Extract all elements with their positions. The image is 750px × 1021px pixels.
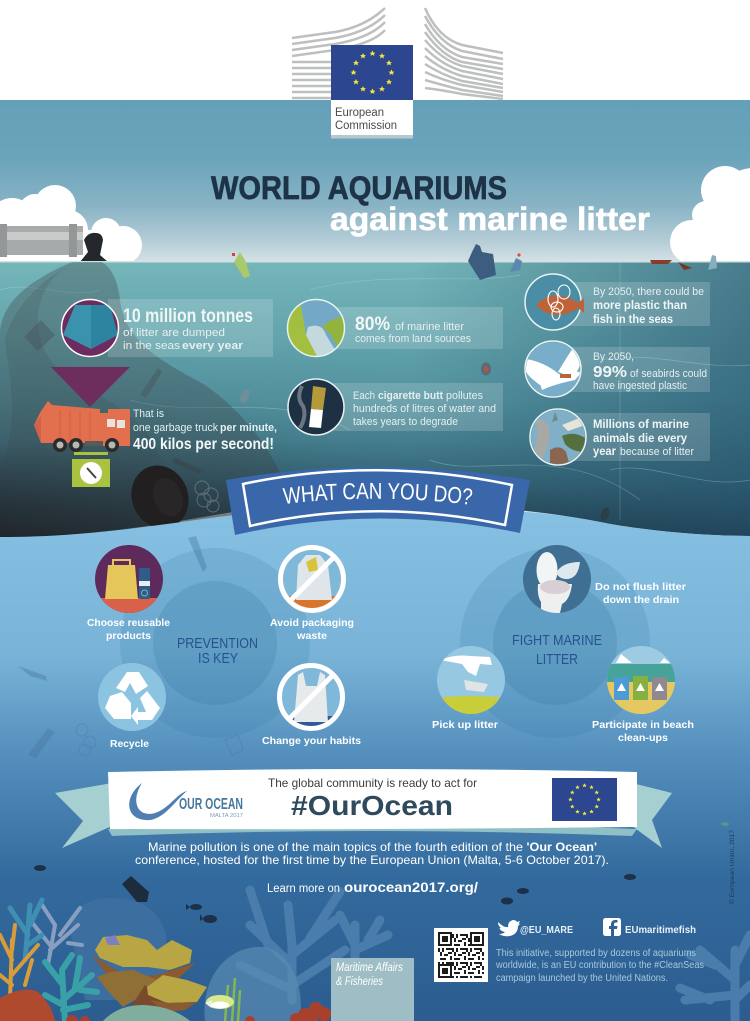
European Commission logo: European [335, 107, 384, 119]
icon: avoid packaging [278, 545, 346, 615]
title [211, 170, 650, 237]
social media: @EU_MARE [520, 924, 573, 936]
icon: cigarette butt [288, 379, 344, 435]
text: garbage truck per minute: one garbage truck [133, 422, 218, 434]
logo: our ocean: MALTA 2017 [210, 813, 243, 819]
panel: cigarette butt: takes years to degrade [353, 416, 458, 428]
learn more: ourocean2017.org/ [344, 879, 478, 895]
cloud left [0, 185, 142, 265]
social media: EUmaritimefish [625, 924, 696, 936]
label: waste [296, 630, 327, 642]
panel: cigarette butt: cigarette butt [378, 390, 443, 402]
DG label box [331, 958, 414, 1021]
blue branching coral [10, 900, 42, 960]
panel: 80% land sources [288, 300, 503, 358]
panel: seabirds: have ingested plastic [593, 380, 687, 392]
panel: more plastic than fish: By 2050, there could be [593, 286, 704, 298]
panel: seabirds: By 2050, [593, 351, 634, 363]
cloud right [670, 166, 750, 273]
yellow and orange branch coral [0, 925, 38, 1000]
icon: land and river [288, 300, 346, 358]
initiative text: This initiative, supported by dozens of aquariums [496, 948, 696, 959]
label: Avoid packaging [270, 617, 354, 629]
panel: cigarette butt: pollutes [446, 390, 483, 402]
panel: cigarette butt [288, 379, 503, 435]
icon: facebook [603, 918, 621, 936]
icon: seagull [525, 341, 582, 397]
conference text: Marine pollution is one of the main topics of the fourth edition of the 'Our Ocean' [148, 840, 597, 854]
panel: marine animals: Millions of marine [593, 417, 689, 431]
heading: prevention is key: IS KEY [198, 650, 238, 667]
heading: prevention is key: PREVENTION [177, 635, 258, 652]
label [595, 581, 686, 606]
label: Pick up litter [432, 719, 498, 731]
icon: garbage truck [34, 401, 130, 452]
European Commission building [292, 8, 503, 99]
teal coral [45, 955, 97, 1021]
QR code [434, 928, 488, 982]
panel: cigarette butt: hundreds of litres of water and [353, 403, 496, 415]
label [87, 617, 170, 642]
label: clean-ups [618, 732, 668, 744]
light branching coral [30, 905, 82, 965]
text: garbage truck per minute: That is [133, 408, 164, 420]
tire [122, 457, 198, 537]
panel: more plastic than fish: fish in the seas [593, 312, 673, 326]
panel: 10 million tonnes: of litter are dumped [123, 327, 225, 339]
icon: twitter [498, 920, 520, 936]
pipe [0, 224, 83, 257]
brain coral [103, 1005, 190, 1021]
European Commission logo [331, 45, 413, 138]
label: Do not flush litter [595, 581, 686, 593]
icon: toilet [523, 545, 591, 613]
DG label box: & Fisheries [336, 976, 383, 988]
icon: beach clean-up [607, 646, 675, 716]
panel: 10 million tonnes: 10 million tonnes [123, 306, 253, 327]
initiative text: campaign launched by the United Nations. [496, 973, 668, 984]
icon: purple pile of litter [62, 300, 118, 356]
icon: reusable products [95, 545, 163, 614]
arrow: purple triangle [51, 367, 130, 407]
copyright: © European Union, 2017 [729, 829, 736, 904]
lower ocean [0, 510, 750, 1021]
black spill from pipe [80, 233, 108, 262]
label: products [106, 630, 151, 642]
panel: 80% land sources: of marine litter [395, 321, 464, 333]
conference text [135, 840, 609, 867]
fan coral [204, 947, 301, 1021]
icon: change your habits [276, 663, 346, 735]
panel: 10 million tonnes [62, 299, 273, 357]
black litter canister [122, 876, 149, 902]
text: garbage truck per minute: 400 kilos per second! [133, 436, 274, 453]
panel: more plastic than fish [525, 274, 710, 330]
ribbon tail right [632, 783, 672, 848]
panel: 10 million tonnes: every year [182, 340, 244, 352]
label [270, 617, 354, 642]
heading: prevention is key [177, 635, 258, 667]
label [592, 719, 694, 744]
panel: fight marine litter [432, 545, 694, 744]
heading: fight marine litter [512, 632, 602, 668]
panel: 10 million tonnes: in the seas [123, 340, 181, 352]
wave lines [0, 261, 750, 520]
learn more [267, 879, 478, 895]
panel: marine animals: because of litter [620, 446, 694, 458]
logo: our ocean [129, 783, 243, 820]
social media [498, 918, 696, 936]
panel: marine animals: animals die every [593, 431, 687, 445]
banner: what can you do: WHAT CAN YOU DO? [282, 482, 472, 504]
ribbon: #OurOcean [291, 790, 453, 821]
banner: what can you do [226, 467, 530, 535]
ribbon [55, 769, 672, 848]
dark reef mound [70, 898, 170, 1000]
panel: seabirds: of seabirds could [630, 368, 707, 380]
learn more: Learn more on [267, 883, 340, 895]
EU flag [552, 778, 617, 821]
heading: fight marine litter: FIGHT MARINE [512, 632, 602, 649]
initiative text [495, 948, 704, 984]
icon: fish in plastic rings [525, 274, 584, 330]
panel: marine animals: year [593, 444, 616, 458]
conference text: conference, hosted for the first time by the European Union (Malta, 5-6 October 2017). [135, 853, 609, 867]
panel: 80% land sources: comes from land sources [355, 333, 471, 345]
logo: our ocean: OUR OCEAN [179, 796, 243, 813]
European Commission logo: Commission [335, 120, 397, 132]
floating bottles [232, 244, 717, 280]
panel: prevention is key [87, 545, 361, 750]
DG label box: Maritime Affairs [336, 962, 403, 974]
panel: seabirds: 99% [593, 364, 627, 381]
plume of litter [0, 262, 292, 537]
small black fish [34, 822, 729, 923]
icon: recycle [98, 663, 166, 731]
icon: marine animals [530, 409, 588, 466]
panel: more plastic than fish: more plastic than [593, 298, 687, 312]
ribbon: The global community is ready to act for [268, 776, 477, 790]
panel: 80% land sources: 80% [355, 314, 390, 335]
label: Change your habits [262, 735, 361, 747]
red coral right [66, 1002, 331, 1021]
faint litter in lower ocean [18, 536, 243, 758]
table coral [92, 935, 207, 1012]
sea [0, 261, 750, 540]
initiative text: worldwide, is an EU contribution to the #CleanSeas [495, 960, 704, 971]
submerged litter [24, 320, 611, 522]
heading: fight marine litter: LITTER [536, 651, 578, 668]
title: against marine litter [330, 201, 650, 237]
label: down the drain [603, 594, 679, 606]
icon: pick up litter [437, 646, 505, 715]
text: garbage truck per minute: per minute, [220, 422, 277, 434]
label: Participate in beach [592, 719, 694, 731]
panel: marine animals [530, 409, 710, 466]
yellow fish [205, 995, 234, 1009]
text: garbage truck per minute [133, 408, 277, 453]
sea grass [225, 978, 240, 1021]
red coral left [0, 990, 55, 1021]
title: WORLD AQUARIUMS [211, 170, 507, 206]
label: Choose reusable [87, 617, 170, 629]
icon: weighing scale [72, 452, 110, 487]
sky [0, 100, 750, 262]
ribbon tail left [55, 783, 112, 848]
background corals [240, 890, 750, 1021]
panel: seabirds [525, 341, 710, 397]
label: Recycle [110, 738, 149, 750]
panel: cigarette butt: Each [353, 390, 375, 402]
